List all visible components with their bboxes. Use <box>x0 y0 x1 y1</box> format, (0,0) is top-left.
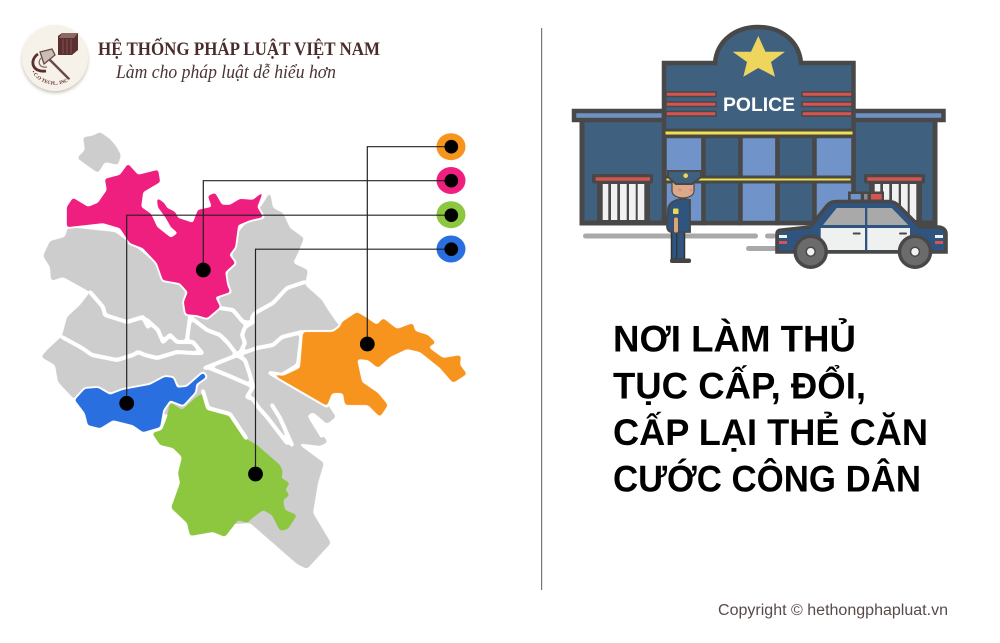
connector: green district <box>248 242 458 481</box>
central tower with arch <box>664 27 854 223</box>
title: CƯỚC CÔNG DÂN <box>613 458 921 500</box>
map: orange district <box>270 312 467 417</box>
legend ring: orange <box>436 133 466 160</box>
map: district dividers <box>62 282 322 445</box>
title: TỤC CẤP, ĐỔI, <box>613 363 866 406</box>
ground lines <box>583 234 778 251</box>
car body <box>777 202 946 252</box>
legend ring: blue <box>436 236 466 262</box>
connector: blue district <box>119 208 458 411</box>
map: grey districts <box>41 132 345 569</box>
connector: pink district <box>196 174 458 277</box>
right wing <box>852 119 935 223</box>
illustration: police officer <box>667 171 701 263</box>
logo: law system emblem <box>20 25 90 95</box>
map: green district <box>152 393 297 537</box>
illustration: police station <box>574 27 944 251</box>
legend ring: pink <box>436 167 466 194</box>
title: NƠI LÀM THỦ <box>613 318 856 360</box>
yellow band upper <box>664 130 854 136</box>
star <box>733 36 785 77</box>
right gate <box>864 174 925 223</box>
left stripes <box>666 92 716 116</box>
map: pink district <box>67 164 263 318</box>
siren <box>848 192 884 202</box>
map: green border <box>203 391 246 438</box>
heading: organisation name: HỆ THỐNG PHÁP LUẬT VIỆT NAM <box>98 38 380 60</box>
tagline: Làm cho pháp luật dễ hiểu hơn <box>115 63 336 83</box>
left gate <box>592 174 653 223</box>
head and tail lights <box>779 235 943 244</box>
left wing <box>582 119 666 223</box>
logo: law system emblem: • C.O TECH... INC • <box>32 71 70 85</box>
copyright: Copyright © hethongphapluat.vn <box>718 602 948 619</box>
illustration: police car <box>777 192 946 267</box>
windows <box>823 208 865 225</box>
map: blue district <box>75 373 206 432</box>
left roof <box>574 111 664 120</box>
left wheel <box>795 236 826 267</box>
right roof <box>853 111 944 120</box>
title <box>613 318 928 500</box>
windows <box>664 136 854 223</box>
yellow band middle <box>665 177 852 182</box>
legend ring: green <box>436 201 466 228</box>
right stripes <box>802 92 852 116</box>
vertical separator <box>541 28 542 590</box>
police sign: POLICE <box>723 94 795 116</box>
doors <box>821 228 865 250</box>
right wheel <box>900 236 930 267</box>
connector: orange district <box>360 140 458 351</box>
map of Hanoi <box>41 132 467 569</box>
title: CẤP LẠI THẺ CĂN <box>613 412 928 453</box>
door handles <box>853 232 861 234</box>
